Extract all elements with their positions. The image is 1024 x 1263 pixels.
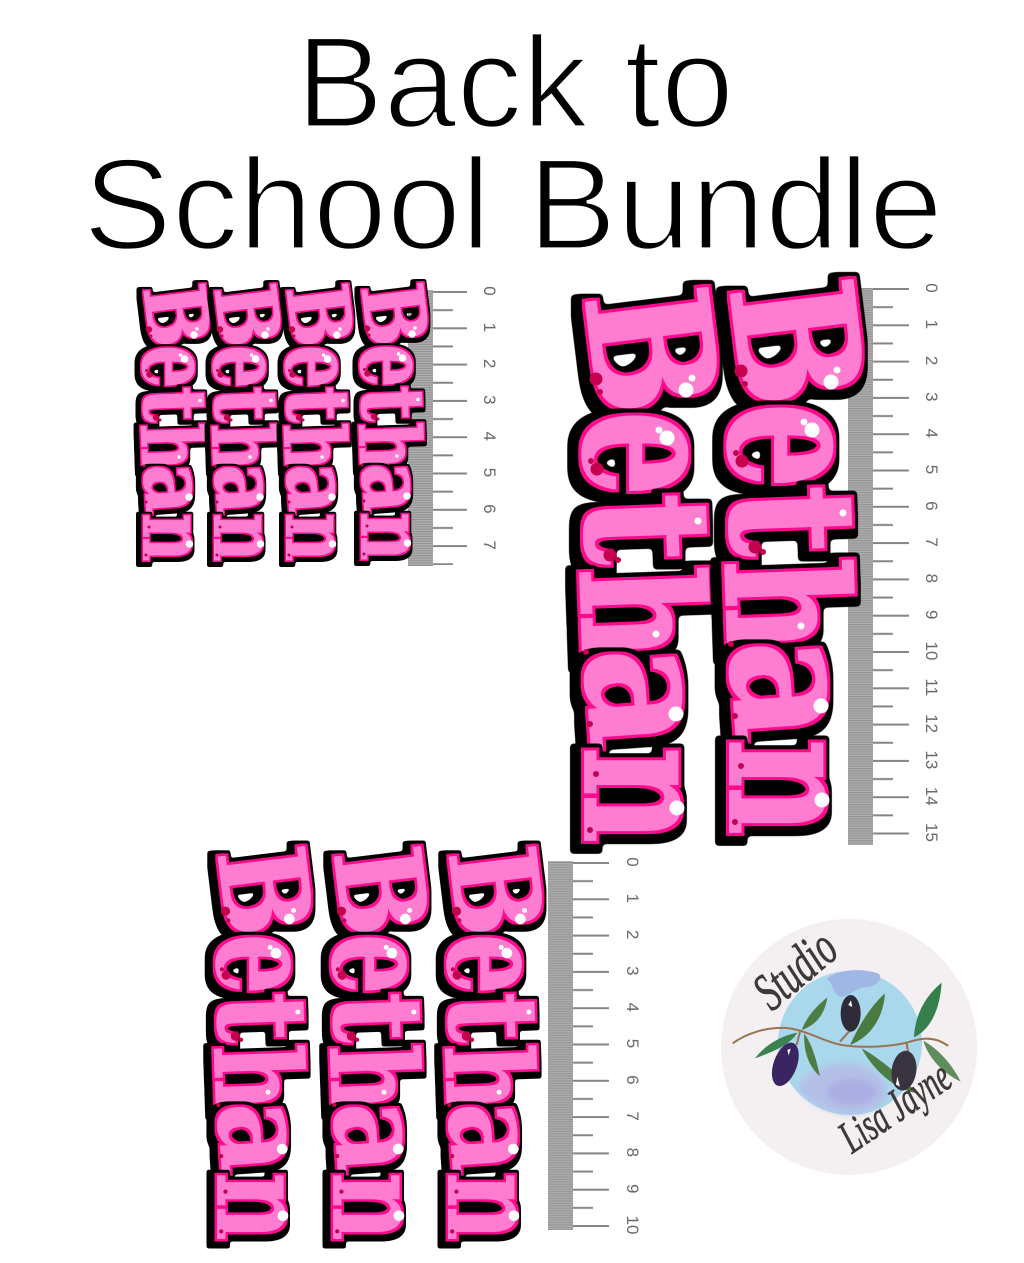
ruler: 15 inch: 10 [922,642,941,660]
name: Bethan small 3: B [266,278,372,352]
ruler: 15 inch: 6 [922,501,941,511]
name: Bethan medium 3: B [420,839,569,943]
ruler: 7 inch: 3 [480,395,499,405]
ruler: 10 inch: 1 [623,894,642,903]
name: Bethan small 4 [338,277,452,560]
name: Bethan small 2 [191,278,305,561]
name: Bethan small 2: a [193,460,300,517]
name: Bethan small 3: e [263,346,377,388]
name: Bethan large 1 [539,277,764,843]
name: Bethan large 1: e [539,411,764,496]
ruler: 10 inch: 4 [623,1002,642,1012]
name: Bethan medium 1: t [188,990,336,1045]
name: Bethan large 1: n [543,747,752,843]
name: Bethan small 4: e [338,344,452,387]
ruler: 15 inch: 12 [922,714,941,733]
name: Bethan medium 2 [301,839,461,1241]
ruler: 15 inch: 14 [922,787,941,806]
title: Back to [296,9,734,155]
ruler: 15 inch: 5 [922,465,941,474]
title: School Bundle [83,131,943,277]
name: Bethan small 4: t [340,384,444,423]
ruler: 10 inch: 7 [623,1111,642,1121]
name: Bethan small 4: h [339,421,439,471]
name: Bethan large 2: a [688,632,900,747]
ruler: 7 inch: 7 [480,540,499,550]
ruler: 7 inch [408,286,499,566]
ruler: 10 inch: 10 [623,1216,642,1234]
name: Bethan small 1: t [122,385,226,424]
ruler: 10 inch: 8 [623,1148,642,1157]
name: Bethan small 2: t [193,385,297,424]
name: Bethan medium 2: e [301,934,461,994]
name: Bethan small 2: h [192,422,292,472]
name: Bethan large 2: e [684,403,909,488]
ruler: 15 inch: 0 [922,283,941,293]
ruler: 15 inch: 1 [922,320,941,329]
name: Bethan medium 3: a [419,1096,571,1178]
ruler: 10 inch: 5 [623,1039,642,1048]
name: Bethan small 4: n [340,512,444,560]
ruler: 10 inch [548,857,642,1234]
name: Bethan medium 1 [185,839,345,1241]
name: Bethan medium 1: a [188,1096,340,1178]
ruler: 15 inch: 7 [922,537,941,547]
logo text: Studio: Studio [741,917,849,1021]
panel: large name set with 15 inch ruler [539,269,941,845]
name: Bethan large 1: B [545,277,755,424]
name: Bethan large 1: t [543,490,753,567]
name: Bethan small 1: h [121,422,221,472]
name: Bethan medium 3 [416,839,576,1241]
panel: small name set with 7 inch ruler [120,277,499,566]
name: Bethan medium 1: n [187,1172,335,1241]
name: Bethan small 3: t [265,385,369,424]
name: Bethan small 4: B [341,277,447,351]
name: Bethan large 2: h [685,556,885,655]
icon: watercolour globe [778,970,922,1115]
ruler: 7 inch: 2 [480,359,499,368]
name: Bethan small 2: n [193,514,297,561]
name: Bethan large 2: t [688,482,898,559]
name: Bethan small 1: a [122,460,229,517]
ruler: 7 inch: 5 [480,468,499,477]
name: Bethan large 2 [684,269,909,835]
name: Bethan medium 1: e [185,934,345,994]
title [83,9,943,277]
name: Bethan medium 2: B [305,839,454,943]
name: Bethan large 2: B [690,269,900,416]
name: Bethan medium 3: t [419,990,567,1045]
panel: medium name set with 10 inch ruler [185,839,642,1241]
ruler: 7 inch: 6 [480,504,499,514]
logo: Studio Lisa Jayne [721,917,977,1175]
name: Bethan medium 2: t [304,990,452,1045]
ruler: 7 inch: 0 [480,286,499,296]
name: Bethan small 3: n [265,514,369,561]
name: Bethan medium 1: h [185,1042,328,1113]
name: Bethan small 3 [263,278,377,561]
ruler: 15 inch: 13 [922,750,941,769]
name: Bethan small 2: e [191,346,305,388]
ruler: 15 inch: 3 [922,392,941,402]
name: Bethan small 1: B [123,278,229,352]
ruler: 15 inch: 8 [922,574,941,583]
ruler: 15 inch: 15 [922,823,941,842]
name: Bethan medium 3: e [416,934,576,994]
ruler: 15 inch [848,283,941,845]
icon: olive branch [733,983,961,1093]
name: Bethan medium 2: h [301,1042,444,1113]
ruler: 10 inch: 3 [623,966,642,976]
name: Bethan medium 1: B [189,839,338,943]
name: Bethan large 1: a [543,640,755,755]
ruler: 10 inch: 0 [623,857,642,867]
name: Bethan medium 3: n [418,1172,566,1241]
name: Bethan medium 2: n [303,1172,451,1241]
ruler: 15 inch: 2 [922,356,941,365]
ruler: 15 inch: 4 [922,428,941,438]
name: Bethan small 3: a [265,460,372,517]
name: Bethan small 2: B [194,278,300,352]
name: Bethan large 2: n [688,739,897,835]
ruler: 10 inch: 6 [623,1075,642,1085]
ruler: 7 inch: 4 [480,431,499,441]
name: Bethan medium 3: h [416,1042,559,1113]
ruler: 10 inch: 2 [623,930,642,939]
name: Bethan small 1 [120,278,234,561]
logo text: Lisa Jayne: Lisa Jayne [829,1051,960,1163]
ruler: 10 inch: 9 [623,1184,642,1193]
name: Bethan small 4: a [340,459,447,516]
name: Bethan small 1: e [120,346,234,388]
name: Bethan large 1: h [540,564,740,663]
ruler: 7 inch: 1 [480,323,499,332]
name: Bethan small 1: n [122,514,226,561]
ruler: 15 inch: 9 [922,610,941,619]
ruler: 15 inch: 11 [922,678,941,696]
name: Bethan small 3: h [264,422,364,472]
name: Bethan medium 2: a [304,1096,456,1178]
